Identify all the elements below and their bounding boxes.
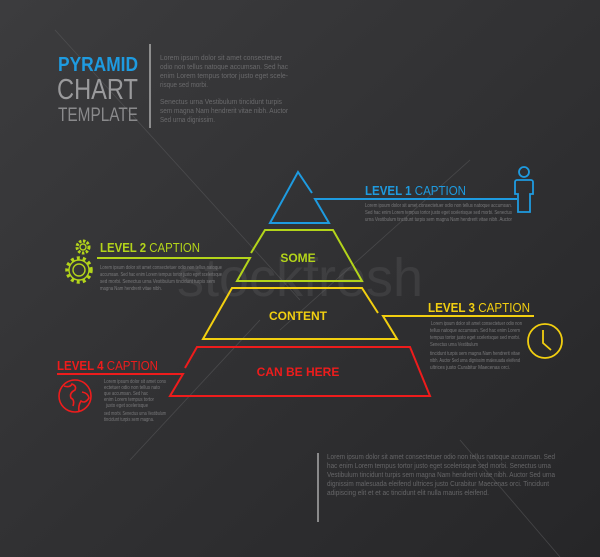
level 2 caption: magna Nam hendrerit vitae nibh. — [100, 286, 162, 292]
level 3 caption: Lorem ipsum dolor sit amet consectetuer odio non — [431, 321, 522, 327]
level 4 caption: LEVEL 4 CAPTION — [57, 358, 158, 373]
intro text: Lorem ipsum dolor sit amet consectetuer — [160, 55, 283, 62]
title: PYRAMID — [58, 54, 138, 76]
bottom text block: adipiscing elit et et ac tincidunt elit nulla mauris eleifend. — [327, 490, 489, 497]
bottom text block: hac enim Lorem tempus tortor justo eget scelerisque sed morbi. Senectus urna — [327, 463, 551, 470]
level 4 caption: justo eget scelerisque — [105, 403, 148, 409]
bottom text block: dignissim malesuada eleifend ultrices justo Curabitur Maecenas orci. Tincidunt — [327, 481, 549, 488]
level 3 caption: ultrices justo Curabitur Maecenas orci. — [430, 365, 510, 371]
level 4 caption: tincidunt turpis sem magna. — [104, 417, 154, 423]
level 3 caption — [428, 300, 530, 371]
level 4 caption: Lorem ipsum dolor sit amet cons — [104, 379, 166, 385]
icon: globe — [59, 380, 91, 412]
level 2 caption: Lorem ipsum dolor sit amet consectetuer odio non tellus natoque — [100, 265, 222, 271]
icon: gears — [67, 241, 91, 282]
level 3 caption: Senectus urna Vestibulum — [430, 342, 478, 348]
level 3 caption: LEVEL 3 CAPTION — [428, 300, 530, 315]
level 1 caption: urna Vestibulum tincidunt turpis sem magna Nam hendrerit vitae nibh. Auctor — [365, 217, 512, 223]
level 2 caption — [100, 240, 222, 292]
level 1 caption: Lorem ipsum dolor sit amet consectetuer odio non tellus natoque accumsan. — [365, 203, 512, 209]
level 3 caption: tincidunt turpis sem magna Nam hendrerit vitae — [430, 351, 520, 357]
bottom text block — [318, 453, 555, 522]
pyramid level 3 (yellow): CONTENT — [269, 309, 328, 323]
level 2 caption: sed morbi. Senectus urna Vestibulum tincidunt turpis sem — [100, 279, 215, 285]
icon: clock — [528, 324, 562, 358]
pyramid level 1 (blue) — [270, 172, 517, 223]
icon: person — [515, 167, 533, 212]
level 4 caption: sed morbi. Senectus urna Vestibulum — [104, 411, 166, 417]
bottom text block: Vestibulum tincidunt turpis sem magna Nam hendrerit vitae nibh. Auctor Sed urna — [327, 472, 555, 479]
level 3 caption: tempus tortor justo eget scelerisque sed morbi. — [430, 335, 520, 341]
intro text: Sed urna dignissim. — [160, 117, 215, 124]
level 2 caption: LEVEL 2 CAPTION — [100, 240, 200, 255]
level 4 caption: que accumsan. Sed hac — [104, 391, 148, 397]
intro text: sem magna Nam hendrerit vitae nibh. Auctor — [160, 108, 289, 115]
level 4 caption: enim Lorem tempus tortor — [104, 397, 154, 403]
title — [57, 54, 138, 126]
level 1 caption: LEVEL 1 CAPTION — [365, 183, 466, 198]
level 1 caption — [365, 183, 512, 223]
intro text: odio non tellus natoque accumsan. Sed hac — [160, 64, 288, 71]
intro text: Senectus urna Vestibulum tincidunt turpis — [160, 99, 282, 106]
pyramid level 4 (red) — [57, 347, 430, 396]
level 3 caption: tellus natoque accumsan. Sed hac enim Lorem — [430, 328, 520, 334]
pyramid level 2 (green) — [97, 230, 362, 281]
level 4 caption: ectetuer odio non tellus nato — [104, 385, 160, 391]
level 4 caption — [57, 358, 166, 423]
pyramid level 3 (yellow) — [203, 288, 534, 339]
intro text: risque sed morbi. — [160, 82, 208, 89]
intro text — [160, 55, 289, 124]
title: CHART — [57, 74, 138, 106]
pyramid level 4 (red): CAN BE HERE — [257, 365, 339, 379]
level 3 caption: nibh. Auctor Sed urna dignissim malesuada eleifend — [430, 358, 520, 364]
intro text: enim Lorem tempus tortor justo eget scele- — [160, 73, 289, 80]
pyramid level 2 (green): SOME — [280, 251, 316, 265]
level 1 caption: Sed hac enim Lorem tempus tortor justo eget scelerisque sed morbi. Senectus — [365, 210, 512, 216]
title: TEMPLATE — [58, 105, 138, 126]
bottom text block: Lorem ipsum dolor sit amet consectetuer odio non tellus natoque accumsan. Sed — [327, 454, 555, 461]
level 2 caption: accumsan. Sed hac enim Lorem tempus tortor justo eget scelerisque — [100, 272, 222, 278]
watermark: stockfresh — [177, 248, 423, 308]
